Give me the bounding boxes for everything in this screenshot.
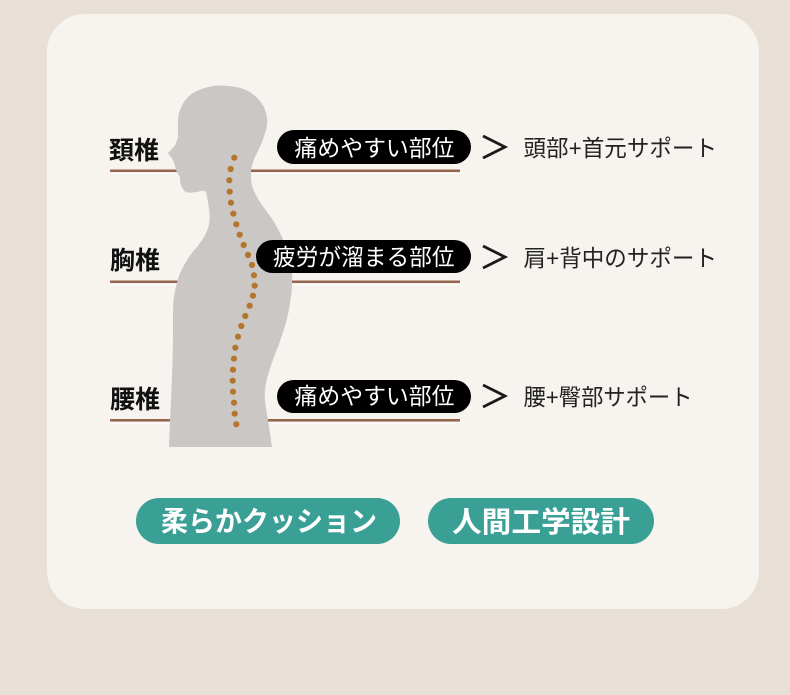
panel: main card (47, 14, 759, 609)
text: shoulder and back support: 肩+背中のサポート (524, 245, 717, 271)
pill: fatigue (256, 240, 471, 273)
icon: human body silhouette (168, 86, 292, 447)
arrow 1 (483, 136, 505, 158)
pill: fatigue: 疲労が溜まる部位 (273, 244, 454, 270)
arrow 3 (483, 385, 505, 407)
guide lines (110, 170, 460, 424)
badge: ergonomic design (428, 498, 654, 544)
badge: soft cushion: 柔らかクッション (161, 506, 377, 537)
pill: neck pain: 痛めやすい部位 (294, 135, 454, 161)
pill: lumbar pain: 痛めやすい部位 (294, 383, 454, 409)
badge: ergonomic design: 人間工学設計 (452, 506, 630, 539)
arrow 2 (483, 246, 505, 268)
label: lumbar: 腰椎 (110, 386, 160, 414)
pill: lumbar pain (277, 380, 471, 413)
label: thoracic: 胸椎 (110, 247, 160, 275)
pill: neck pain (277, 130, 471, 164)
label: cervical: 頚椎 (109, 137, 159, 165)
badge: soft cushion (136, 498, 400, 544)
text: waist and hip support: 腰+臀部サポート (524, 384, 692, 410)
text: head and neck support: 頭部+首元サポート (524, 135, 717, 161)
spine dots (226, 155, 258, 427)
